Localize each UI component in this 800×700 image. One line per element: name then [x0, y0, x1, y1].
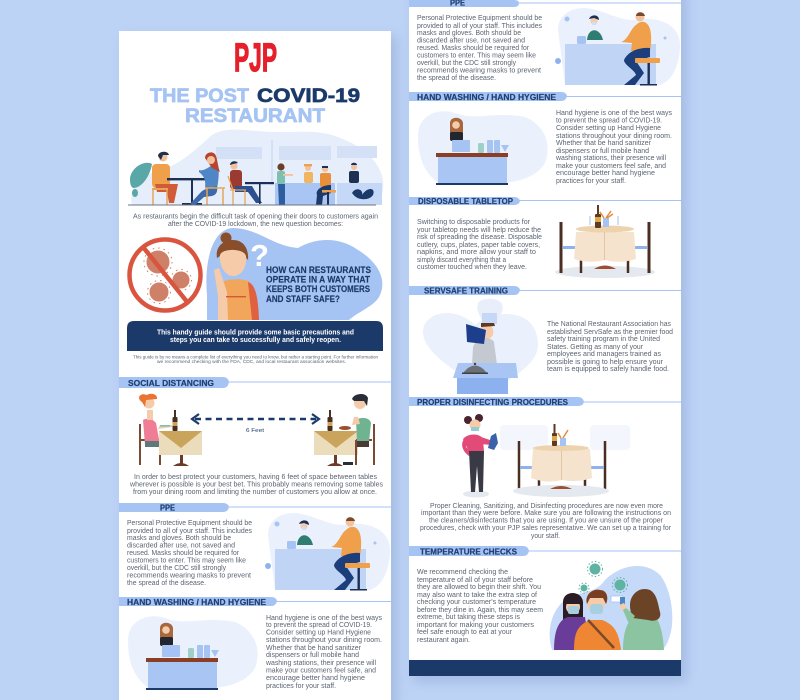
heading: PPE continued [409, 0, 681, 8]
illustration: chef reading [423, 299, 538, 394]
center person [574, 620, 621, 650]
hand washing text: dispensers or full mobile hand [266, 652, 359, 659]
PPE text continued: the spread of the disease. [417, 75, 496, 82]
social distancing text: In order to best protect your customers, having 6 feet of space between tables [134, 474, 377, 481]
intro text: after the COVID-19 lockdown, the new question becomes: [168, 221, 343, 228]
heading: social distancing: SOCIAL DISTANCING [128, 378, 214, 388]
PPE text [127, 520, 252, 587]
diner 2 [190, 152, 225, 205]
heading: hand washing continued: HAND WASHING / HAND HYGIENE [417, 92, 556, 102]
temperature text: We recommend checking the [417, 569, 508, 576]
heading: PPE [119, 502, 391, 512]
hand washing text continued: dispensers or full mobile hand [556, 148, 649, 155]
hand washing text: Consider setting up Hand Hygiene [266, 630, 371, 636]
PPE text continued: discarded after use, not saved and [417, 38, 525, 44]
disinfecting text: the cleaners/disinfectants that you are using. If you are unsure of the proper [429, 518, 664, 524]
title: COVID-19 [257, 85, 360, 107]
social distancing text: wherever is possible is your best bet. This probably means removing some tables [129, 482, 383, 488]
hand washing text [265, 615, 382, 690]
hand washing text: to prevent the spread of COVID-19. [266, 622, 372, 629]
heading: temperature checks [409, 546, 681, 556]
title [150, 85, 360, 127]
PPE text: Personal Protective Equipment should be [127, 520, 252, 527]
counter with staff and customer [275, 163, 382, 205]
hand washing text continued: washing stations, their presence will [555, 155, 666, 162]
hand washing text continued: Whether that be hand sanitizer [556, 140, 652, 147]
diner 3 [228, 161, 274, 205]
heading: hand washing continued [409, 92, 681, 102]
hand washing text: practices for your staff. [266, 683, 336, 690]
disclaimer text [133, 354, 379, 364]
hand washing text: Hand hygiene is one of the best ways [266, 615, 382, 622]
intro text: As restaurants begin the difficult task of opening their doors to customers again [133, 214, 378, 220]
hand washing text continued: practices for your staff. [556, 178, 626, 185]
hand washing text continued: Hand hygiene is one of the best ways [556, 110, 672, 117]
disposable text: simply discard everything that a [417, 257, 506, 264]
banner: guide statement: steps you can take to successfully and safely reopen. [170, 335, 341, 344]
PPE text: discarded after use, not saved and [127, 542, 235, 550]
illustration: temperature check [550, 562, 672, 650]
table 1 [167, 178, 211, 205]
PPE text: customers to enter. This may seem like [127, 558, 246, 564]
PPE text continued: Personal Protective Equipment should be [417, 15, 542, 22]
disposable text: Switching to disposable products for [417, 219, 531, 226]
heading: temperature checks: TEMPERATURE CHECKS [420, 546, 517, 556]
panel: left page [119, 31, 391, 700]
question text: HOW CAN RESTAURANTS [266, 265, 371, 275]
PPE text: masks and gloves. Both should be [127, 535, 231, 542]
disposable text [417, 219, 542, 271]
heading: hand washing: HAND WASHING / HAND HYGIENE [127, 597, 266, 607]
leaf [130, 163, 152, 188]
temperature text [417, 569, 543, 644]
temperature text: temperature of all of your staff before [417, 577, 533, 584]
disposable text: risk of spreading the disease. Disposable [417, 234, 542, 241]
heading: proper disinfecting: PROPER DISINFECTING PROCEDURES [417, 397, 568, 407]
heading: disposable tabletop: DISPOSABLE TABLETOP [418, 196, 513, 206]
hand washing text continued: stations throughout your dining room. [556, 133, 672, 140]
heading: disposable tabletop [409, 196, 681, 206]
illustration: PPE counter continued [555, 8, 680, 86]
disclaimer text: This guide is by no means a complete list of everything you need to know, but rather a starting point. For further information [133, 354, 379, 360]
disinfecting text: Proper Cleaning, Sanitizing, and Disinfecting procedures are now even more [430, 503, 663, 510]
temperature text: important for making your customers [417, 622, 535, 629]
hand washing text continued [555, 110, 672, 185]
PPE text: overkill, but the CDC still strongly [127, 565, 226, 572]
disinfecting text [420, 503, 672, 540]
blob: question background [206, 228, 382, 320]
arrow: 6 feet [192, 414, 319, 424]
PPE text continued: provided to all of your staff. This includes [417, 23, 542, 30]
right person [623, 616, 664, 650]
servsafe text: employees and managers trained as [547, 351, 662, 358]
right diner [339, 394, 374, 465]
PPE text continued: recommends wearing masks to prevent [417, 68, 541, 74]
hand washing text: washing stations, their presence will [265, 660, 376, 667]
disposable text: your tabletop needs will help reduce the [417, 227, 541, 234]
distance label: 6 Feet [246, 428, 265, 434]
temperature text: extreme, but taking these steps is [417, 614, 520, 621]
question text: KEEPS BOTH CUSTOMERS [266, 284, 370, 294]
hand washing text continued: encourage better hand hygiene [556, 170, 655, 177]
servsafe text: established ServSafe as the premier food [547, 329, 673, 336]
banner: guide statement [127, 321, 383, 351]
illustration: hand washing continued [418, 111, 548, 185]
PPE text: the spread of the disease. [127, 580, 206, 587]
icon: question mark: ? [250, 238, 269, 273]
hand washing text: make your customers feel safe, and [266, 668, 376, 674]
servsafe text: safety training program in the United [547, 336, 660, 343]
thermometer [611, 596, 623, 602]
temperature text: they are allowed to begin their shift. You [417, 584, 541, 591]
heading: social distancing [119, 377, 391, 388]
hand washing text continued: make your customers feel safe, and [556, 163, 666, 170]
PPE text: reused. Masks should be required for [127, 550, 240, 557]
temperature text: before they dine in. Again, this may seem [417, 607, 543, 614]
heading: proper disinfecting [409, 397, 681, 407]
icon: virus prohibition [130, 240, 200, 310]
heading: PPE: PPE [160, 502, 175, 512]
question text: OPERATE IN A WAY THAT [266, 274, 370, 284]
temperature text: may also want to take the extra step of [417, 592, 537, 599]
PPE text continued: overkill, but the CDC still strongly [417, 60, 516, 67]
disposable text: cutlery, cups, plates, paper table covers, [417, 242, 540, 249]
illustration: restaurant scene [128, 130, 383, 206]
hand washing text continued: to prevent the spread of COVID-19. [556, 118, 662, 124]
panel: right page [409, 0, 681, 676]
hand washing text: stations throughout your dining room. [266, 637, 382, 644]
PPE text: provided to all of your staff. This includes [127, 528, 252, 535]
PPE text continued: customers to enter. This may seem like [417, 52, 536, 60]
illustration: disposable table [555, 205, 655, 278]
servsafe text: team is equipped to safely handle food. [547, 366, 669, 373]
social distancing text [129, 474, 383, 496]
title: THE POST [150, 85, 249, 107]
PPE text continued [417, 15, 542, 82]
right table [314, 410, 358, 466]
hand washing text: encourage better hand hygiene [266, 675, 365, 682]
disinfecting text: important than they were before. Make sure you are following the instructions on [421, 510, 671, 517]
illustration: six feet apart [139, 394, 374, 466]
intro text [133, 214, 378, 228]
left person [563, 593, 583, 622]
disposable text: napkins, and more allow your staff to [417, 249, 536, 256]
servsafe text [547, 321, 673, 373]
hand washing text continued: Consider setting up Hand Hygiene [556, 125, 661, 132]
diner 1 [152, 152, 178, 205]
illustration: hand washing [128, 616, 258, 690]
servsafe text: States. Getting as many of your [547, 344, 644, 351]
temperature text: restaurant again. [417, 637, 470, 644]
question text [266, 265, 371, 304]
PPE text continued: masks and gloves. Both should be [417, 30, 521, 37]
left diner [139, 394, 172, 465]
PPE text: recommends wearing masks to prevent [127, 572, 251, 580]
question text: AND STAFF SAFE? [266, 294, 340, 304]
temperature text: checking your customer's temperature [417, 599, 536, 606]
title: RESTAURANT [185, 105, 325, 127]
footer band [409, 660, 681, 676]
logo: PJP [234, 36, 277, 80]
icon: thinking woman [214, 232, 259, 320]
heading: servsafe: SERVSAFE TRAINING [424, 286, 508, 296]
illustration: disinfecting [462, 414, 630, 498]
PPE text continued: reused. Masks should be required for [417, 45, 530, 52]
illustration: PPE counter [265, 513, 390, 590]
temperature text: feel safe enough to eat at your [417, 629, 513, 636]
disinfecting text: your staff. [531, 533, 560, 540]
servsafe text: The National Restaurant Association has [547, 321, 671, 328]
heading: hand washing [119, 597, 391, 607]
servsafe text: possible is going to help ensure your [547, 359, 664, 366]
left table [159, 410, 202, 466]
hand washing text: Whether that be hand sanitizer [266, 645, 362, 652]
disinfecting text: procedures, check with your PJP sales representative. We can set up a training for [420, 525, 672, 532]
social distancing text: from your dining room and limiting the number of customers you allow at once. [133, 489, 377, 496]
disposable text: customer touched when they leave. [417, 264, 527, 271]
heading: servsafe [409, 286, 681, 296]
banner: guide statement: This handy guide should provide some basic precautions and [157, 328, 354, 336]
disclaimer text: we recommend checking with the FDA, CDC, and local restaurant association websites. [157, 359, 346, 364]
